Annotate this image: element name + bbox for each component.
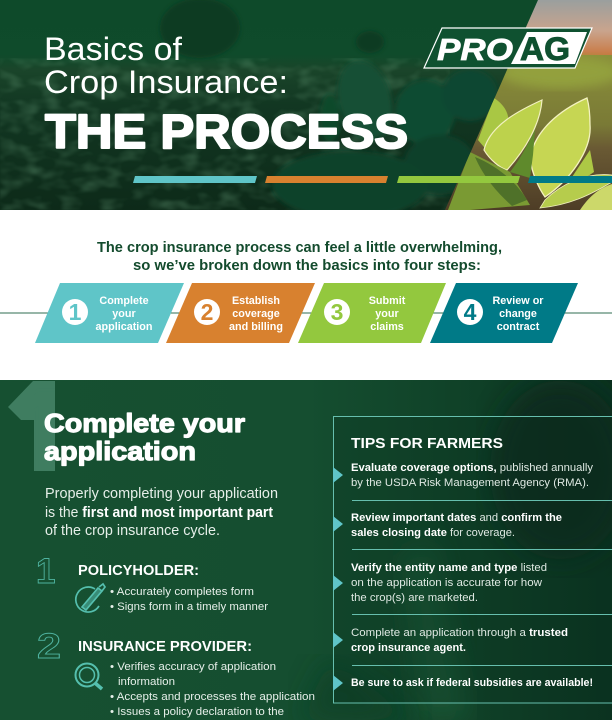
intro section	[0, 210, 612, 380]
insurance provider bullets: information	[118, 676, 175, 688]
tip text: Evaluate coverage options, published annually	[351, 462, 594, 474]
tree silhouettes	[160, 0, 384, 58]
intro text: The crop insurance process can feel a little overwhelming,	[97, 239, 502, 256]
policyholder bullets: • Signs form in a timely manner	[110, 601, 268, 613]
foreground leaves, tinted	[272, 55, 498, 219]
logo: AG	[520, 31, 570, 67]
tips heading: TIPS FOR FARMERS	[351, 435, 503, 452]
step 4: change	[499, 308, 537, 320]
leaves	[448, 98, 612, 210]
policyholder block	[36, 552, 268, 613]
logo: PRO	[437, 32, 513, 67]
icon: magnifier	[76, 664, 102, 689]
step 3: claims	[370, 321, 404, 333]
tip text: sales closing date for coverage.	[351, 527, 515, 539]
step 4: contract	[497, 321, 540, 333]
section heading: application	[44, 436, 196, 466]
outline number 1: 1	[36, 552, 55, 591]
header banner	[0, 0, 612, 219]
colour bars	[133, 176, 612, 183]
outline number 2: 2	[37, 627, 61, 666]
big number 1	[8, 381, 55, 471]
big number 1: 1	[0, 355, 89, 534]
step 3: Submit	[369, 295, 406, 307]
step 3: your	[375, 308, 399, 320]
section intro text	[45, 486, 278, 539]
tip text: by the USDA Risk Management Agency (RMA).	[351, 477, 589, 489]
title	[44, 31, 408, 159]
tip text	[351, 462, 594, 689]
title: Basics of	[44, 31, 182, 67]
insurance provider bullets: • Accepts and processes the application	[110, 691, 315, 703]
tip text: crop insurance agent.	[351, 642, 466, 654]
logo	[424, 28, 592, 68]
step 4: Review or	[492, 295, 544, 307]
title: Crop Insurance:	[44, 64, 288, 100]
step 1: Complete	[99, 295, 149, 307]
panel: tips for farmers	[333, 416, 612, 703]
tip text: Be sure to ask if federal subsidies are available!	[351, 677, 593, 689]
insurance provider bullets	[110, 661, 315, 718]
intro text	[97, 239, 502, 274]
policyholder bullets	[110, 586, 268, 613]
tip arrows	[333, 467, 343, 691]
step 2: 2	[201, 299, 213, 325]
step 1: your	[112, 308, 136, 320]
step 1	[35, 283, 184, 343]
section heading	[44, 408, 245, 466]
step one section background	[0, 380, 612, 720]
insurance provider block	[37, 627, 315, 718]
tip text: the crop(s) are marketed.	[351, 592, 478, 604]
section heading: Complete your	[44, 408, 245, 438]
step 1: 1	[69, 299, 82, 325]
section intro text: Properly completing your application	[45, 486, 278, 502]
section intro text: of the crop insurance cycle.	[45, 523, 220, 539]
insurance provider bullets: • Issues a policy declaration to the	[110, 706, 284, 718]
crop photo panel	[440, 0, 612, 210]
field texture	[0, 58, 450, 210]
tip text: Review important dates and confirm the	[351, 512, 562, 524]
icon: pen in circle	[76, 584, 105, 612]
step 4: 4	[464, 299, 477, 325]
intro text: so we’ve broken down the basics into four steps:	[133, 257, 481, 274]
step 3: 3	[331, 299, 343, 325]
step 1: application	[96, 321, 152, 333]
step 4	[430, 283, 578, 343]
policyholder heading: POLICYHOLDER:	[78, 563, 199, 579]
policyholder bullets: • Accurately completes form	[110, 586, 254, 598]
step 2: coverage	[232, 308, 280, 320]
tip text: on the application is accurate for how	[351, 577, 542, 589]
tip text: Complete an application through a trusted	[351, 627, 568, 639]
insurance provider bullets: • Verifies accuracy of application	[110, 661, 276, 673]
title: THE PROCESS	[45, 106, 408, 159]
step 2: and billing	[229, 321, 283, 333]
step 2: Establish	[232, 295, 280, 307]
insurance provider heading: INSURANCE PROVIDER:	[78, 639, 252, 655]
step 3	[298, 283, 446, 343]
tip text: Verify the entity name and type listed	[351, 562, 547, 574]
step 2	[166, 283, 315, 343]
tip dividers	[352, 500, 612, 666]
section intro text: is the first and most important part	[45, 505, 273, 521]
